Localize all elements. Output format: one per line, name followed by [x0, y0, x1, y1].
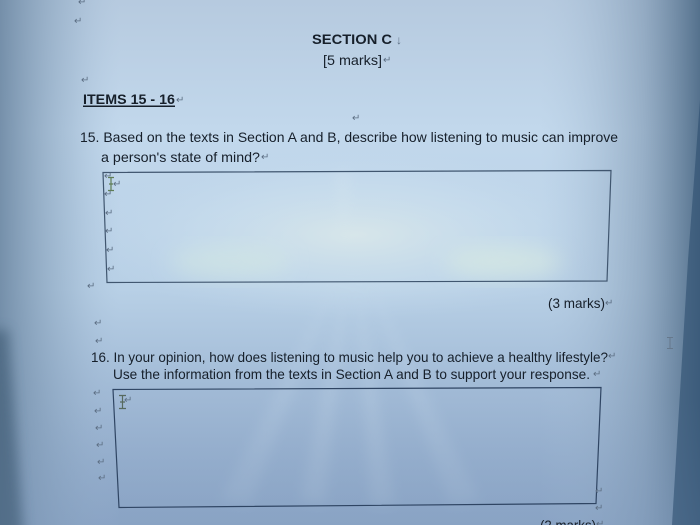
question 16 text: [91, 349, 616, 382]
paragraph marks: ↵: [95, 336, 103, 347]
paragraph marks: [94, 318, 103, 347]
answer box 16: ↵: [124, 395, 132, 406]
heading: marks: ↵: [383, 55, 391, 66]
cursor icon: [108, 178, 114, 190]
marks label: 3 marks: ↵: [605, 298, 613, 309]
stray paragraph marks at top: [74, 0, 86, 27]
question 16 text: ↵: [593, 369, 601, 380]
marks label: 3 marks: (3 marks): [548, 295, 605, 311]
paragraph marks beside box 16: ↵: [96, 440, 104, 451]
question 15 text: [80, 129, 618, 165]
question 16 text: ↵: [608, 351, 616, 362]
paragraph mark: ↵: [87, 281, 95, 292]
heading: section title: SECTION C: [312, 31, 392, 47]
answer box 16: ↵: [595, 503, 603, 514]
question 15 text: a person's state of mind?: [101, 149, 260, 165]
answer box 15: ↵: [107, 264, 115, 275]
cursor icon: [119, 396, 126, 408]
paragraph mark: ↵: [81, 75, 89, 86]
paragraph marks beside box 16: ↵: [94, 406, 102, 417]
paragraph marks beside box 16: ↵: [97, 457, 105, 468]
question 15 text: 15. Based on the texts in Section A and B, describe how listening to music can improve: [80, 129, 618, 145]
answer box 16: [113, 388, 603, 514]
answer box 15: ↵: [105, 226, 113, 237]
heading: items 15-16: ITEMS 15 - 16: [83, 91, 175, 107]
paragraph marks beside box 16: [93, 388, 106, 484]
question 16 text: Use the information from the texts in Section A and B to support your response.: [113, 366, 590, 382]
paragraph marks beside box 16: ↵: [98, 473, 106, 484]
paragraph marks: ↵: [94, 318, 102, 329]
answer box 16: ↵: [595, 486, 603, 497]
answer box 15: [103, 170, 611, 282]
paragraph mark: ↵: [352, 113, 360, 124]
paragraph marks beside box 16: ↵: [93, 388, 101, 399]
answer box 15: ↵: [106, 245, 114, 256]
answer box 15: ↵: [105, 208, 113, 219]
paragraph marks beside box 16: ↵: [95, 423, 103, 434]
question 15 text: ↵: [261, 152, 269, 163]
answer box 15: ↵: [113, 179, 121, 190]
question 16 text: 16. In your opinion, how does listening to music help you to achieve a healthy lifestyle?: [91, 349, 608, 365]
text cursor icon at right: [667, 338, 673, 348]
heading: marks: [5 marks]: [323, 52, 382, 68]
answer box 15: ↵: [104, 171, 112, 182]
heading: section title: ↓: [396, 33, 402, 47]
heading: items 15-16: ↵: [176, 95, 184, 106]
stray paragraph marks at top: ↵: [74, 16, 82, 27]
answer box 15: ↵: [104, 189, 112, 200]
